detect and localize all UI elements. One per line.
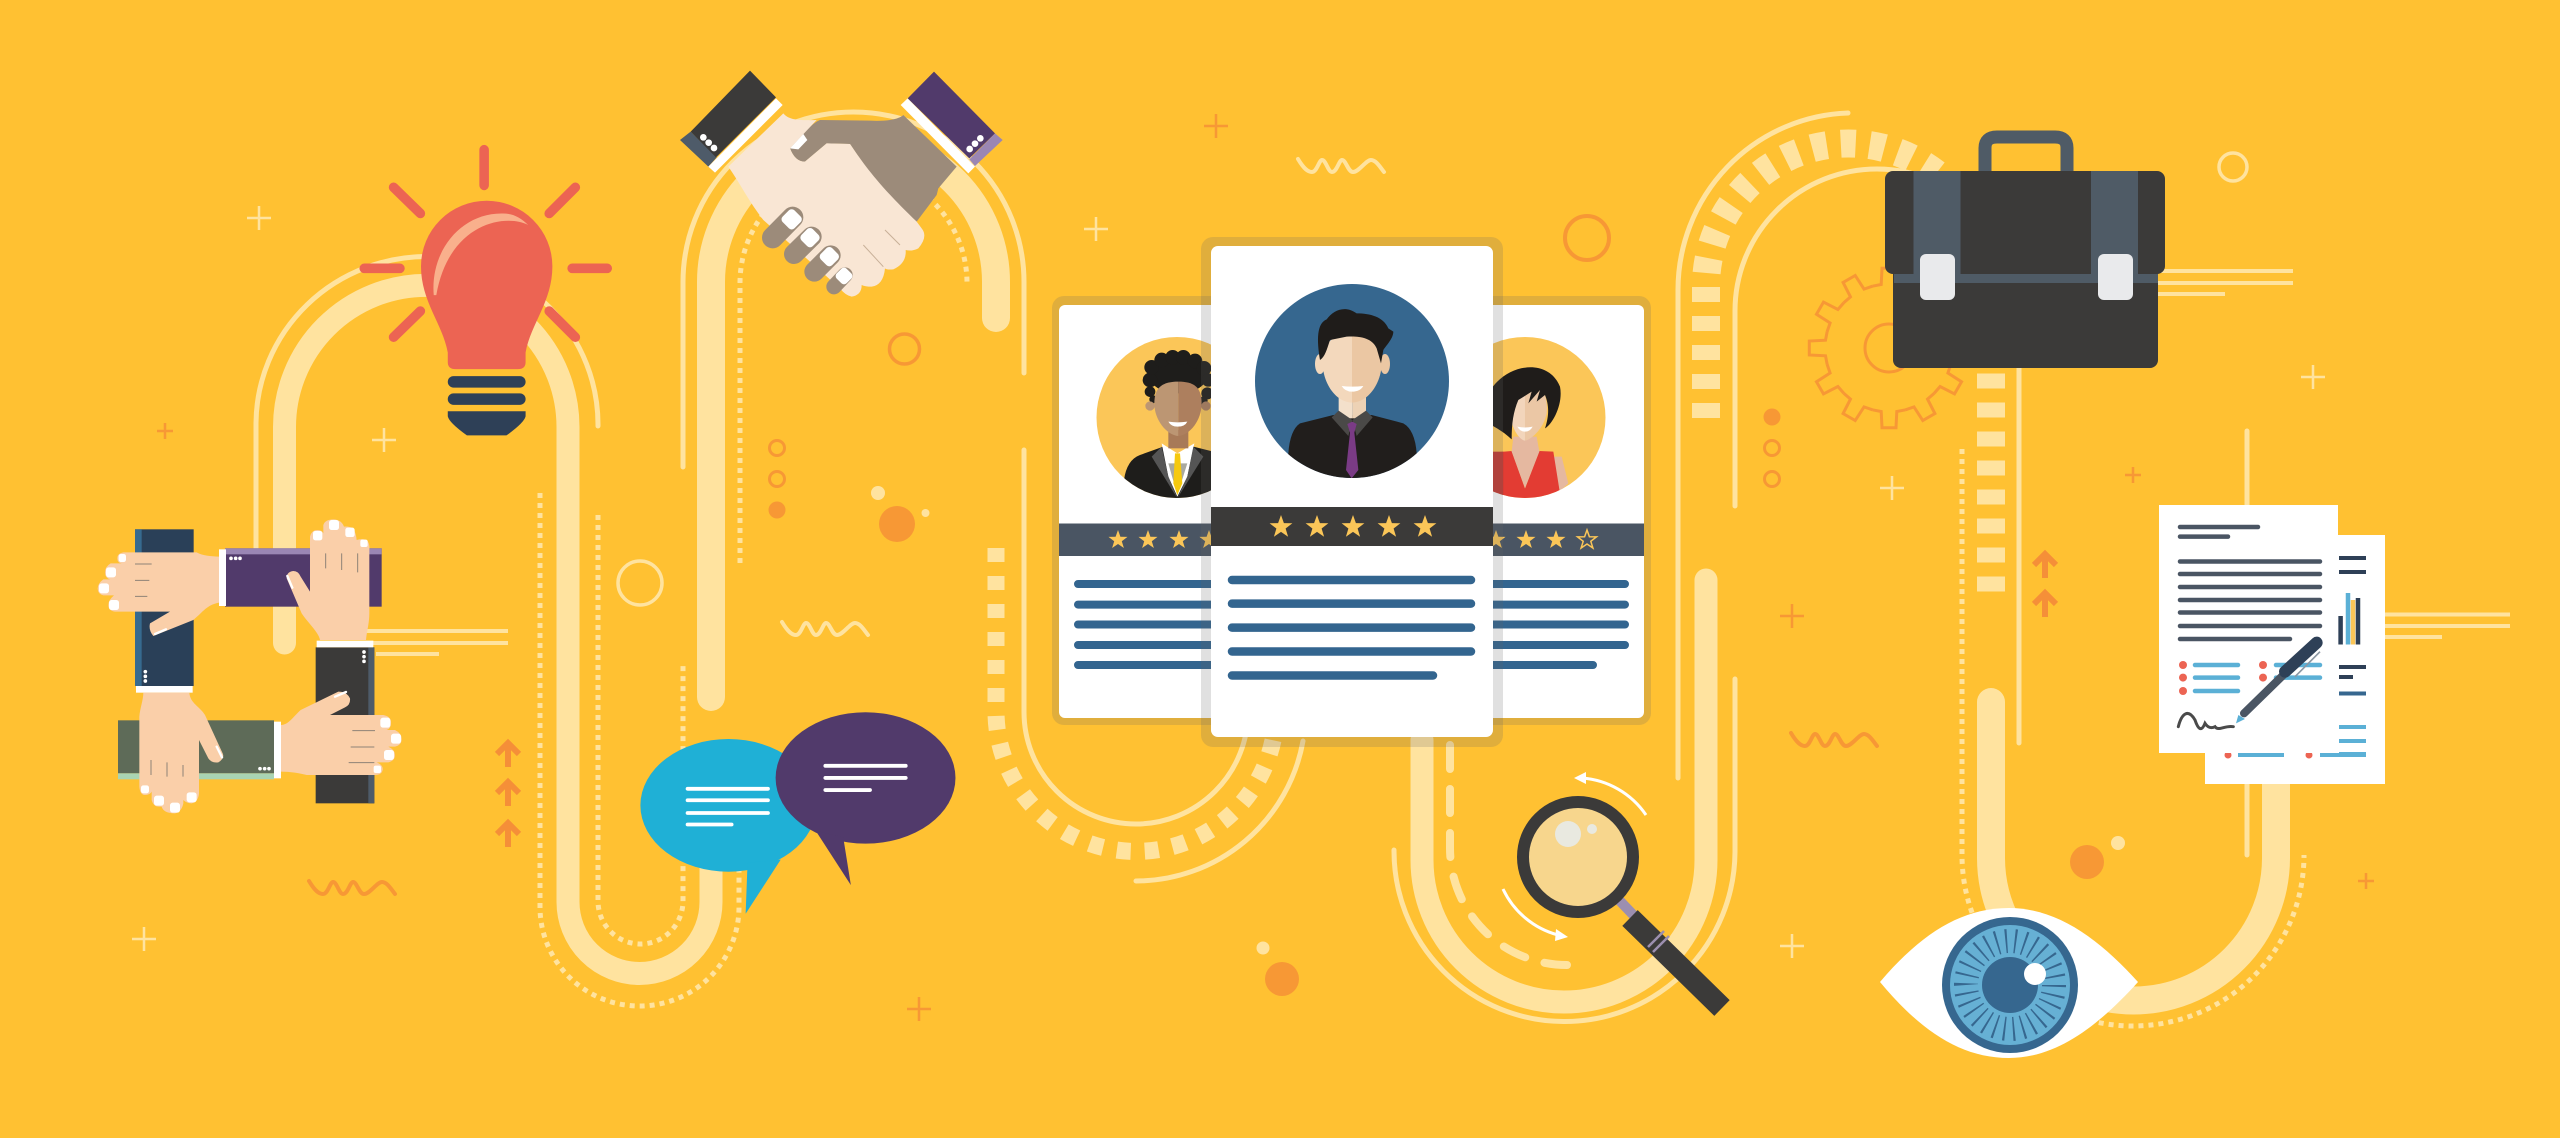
icon: magnifying glass (1503, 772, 1722, 1008)
panel: right candidate card (1493, 296, 1651, 725)
panel: center candidate card (1201, 237, 1503, 747)
icon: documents with pen (2159, 505, 2385, 784)
speed lines (366, 271, 2510, 654)
avatar: man with dark suit and purple tie (1288, 309, 1417, 478)
icon: light bulb (364, 150, 607, 435)
icon: four interlocked hands (98, 519, 402, 813)
icon: gear outline (1809, 268, 1969, 428)
icon: speech bubbles (640, 712, 955, 914)
decorative plus signs (132, 114, 2374, 1021)
icon: briefcase (1885, 137, 2165, 368)
avatar: man with curly hair (1124, 350, 1211, 498)
panel: left candidate card (1052, 296, 1211, 725)
avatar: woman with short black hair (1493, 367, 1568, 498)
icon: eye (1880, 908, 2138, 1058)
orange up arrows (497, 554, 2056, 847)
decorative rings and dots (618, 153, 2247, 996)
icon: handshake (680, 71, 1003, 297)
winding road paths (256, 112, 2304, 1026)
decorative squiggles (309, 159, 1877, 894)
